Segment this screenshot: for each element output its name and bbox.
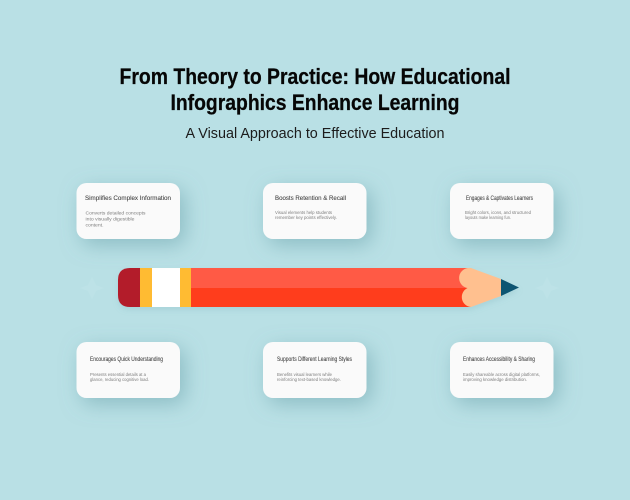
panel: engages and captivates learners: layouts make learning fun. xyxy=(465,215,511,220)
icon: faint right star xyxy=(535,277,559,299)
panel: engages and captivates learners xyxy=(450,183,554,239)
panel: encourages quick understanding: Encourages Quick Understanding xyxy=(90,357,163,363)
panel: supports different learning styles xyxy=(263,342,366,398)
panel: engages and captivates learners: Bright colors, icons, and structured xyxy=(465,210,531,215)
icon: faint left star xyxy=(80,277,104,299)
panel: boosts retention and recall: Boosts Retention & Recall xyxy=(275,196,346,202)
pencil ferrule xyxy=(140,268,191,307)
panel: enhances accessibility and sharing: Easily shareable across digital platforms, xyxy=(463,372,540,377)
panel: simplifies complex information: into visually digestible xyxy=(86,216,135,222)
panel: supports different learning styles: Supports Different Learning Styles xyxy=(277,357,352,363)
panel: enhances accessibility and sharing: improving knowledge distribution. xyxy=(463,377,527,382)
pencil body xyxy=(191,268,471,307)
subtitle: A Visual Approach to Effective Education xyxy=(186,126,444,142)
panel: boosts retention and recall: Visual elements help students xyxy=(275,210,333,215)
panel: encourages quick understanding xyxy=(76,342,180,398)
panel: enhances accessibility and sharing xyxy=(450,342,554,398)
title xyxy=(120,64,510,115)
panel: encourages quick understanding: glance, reducing cognitive load. xyxy=(90,377,149,382)
panel: simplifies complex information: Simplifies Complex Information xyxy=(85,196,171,202)
panel: boosts retention and recall: remember key points effectively. xyxy=(275,215,337,220)
title: Infographics Enhance Learning xyxy=(170,90,460,115)
panel: supports different learning styles: reinforcing text-based knowledge. xyxy=(277,377,341,382)
panel: enhances accessibility and sharing: Enhances Accessibility & Sharing xyxy=(463,357,535,363)
panel: engages and captivates learners: Engages & Captivates Learners xyxy=(466,196,533,202)
pencil wood tip xyxy=(459,268,501,307)
panel: simplifies complex information: Converts detailed concepts xyxy=(86,210,146,216)
pencil xyxy=(118,268,519,307)
panel: encourages quick understanding: Presents essential details at a xyxy=(90,372,146,377)
panel: simplifies complex information xyxy=(76,183,180,239)
title: From Theory to Practice: How Educational xyxy=(120,64,510,89)
panel: simplifies complex information: content. xyxy=(86,222,104,228)
panel: boosts retention and recall xyxy=(263,183,366,239)
pencil eraser xyxy=(118,268,140,307)
panel: supports different learning styles: Benefits visual learners while xyxy=(277,372,332,377)
pencil lead xyxy=(501,279,519,296)
